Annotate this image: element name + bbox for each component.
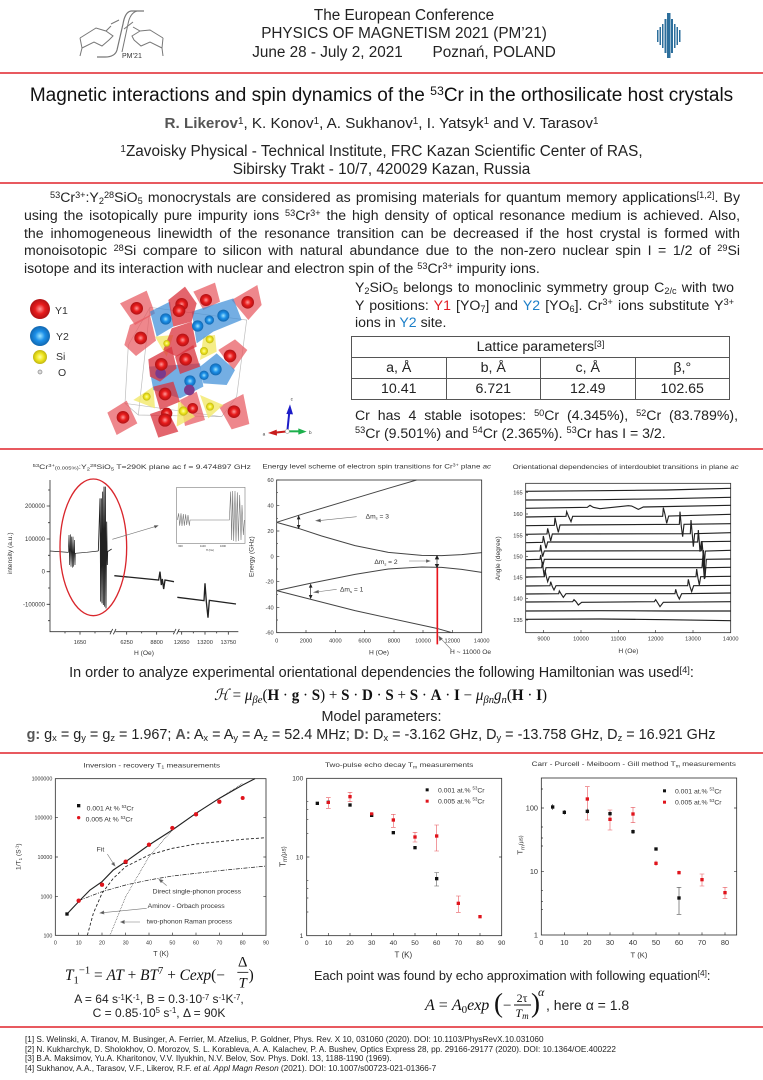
title: Magnetic interactions and spin dynamics of the 53Cr in the orthosilicate host crystals [30, 84, 733, 106]
chart: EPR spectrum: 12650 [174, 640, 190, 646]
chart: two-pulse echo decay: m [283, 857, 289, 862]
formula: T1 relaxation: T [239, 975, 249, 991]
chart: Carr-Purcell-Meiboom-Gill: m [676, 763, 680, 768]
affiliation: 1Zavoisky Physical - Technical Institute, FRC Kazan Scientific Center of RAS, [120, 143, 643, 160]
formula: echo approximation: A = A [425, 997, 462, 1014]
lattice parameters table: 12.49 [570, 381, 606, 397]
chart: EPR spectrum: 100000 [25, 537, 46, 543]
chart: two-pulse echo decay: 1 [300, 933, 304, 940]
chart: Carr-Purcell-Meiboom-Gill: 60 [675, 938, 683, 947]
chart: energy level scheme: -40 [265, 605, 274, 611]
chart: orientational dependencies: Angle (degree) [495, 536, 502, 580]
chart: energy level scheme: Δm [366, 513, 376, 520]
formula: Hamiltonian: ℋ = μ [214, 687, 253, 704]
chart: inversion recovery T1: 1000 [40, 894, 52, 900]
formula: echo approximation: m [522, 1011, 529, 1021]
chart: orientational dependencies: 140 [513, 596, 523, 602]
formula: Hamiltonian: g [494, 687, 502, 704]
crystal axes [263, 397, 312, 436]
chart: energy level scheme: Δm [340, 587, 350, 594]
chart: two-pulse echo decay: 90 [498, 940, 506, 947]
chart: energy level scheme: s [350, 589, 352, 594]
chart: two-pulse echo decay: 100 [292, 776, 304, 783]
intro text: 53Cr3+:Y228SiO5 monocrystals are considered as promising materials for quantum memory applications[1,2]. By [50, 189, 740, 206]
chart: energy level scheme: H ~ 11000 Oe [450, 649, 491, 656]
crystal description text [355, 279, 734, 330]
chart: orientational dependencies: 10000 [573, 636, 589, 642]
chart: energy level scheme: 8000 [388, 638, 400, 644]
chart: energy level scheme: 6000 [358, 638, 371, 644]
formula: echo approximation: exp [467, 997, 489, 1014]
chart: Carr-Purcell-Meiboom-Gill: Cr [714, 788, 722, 795]
formula: echo approximation: ) [531, 988, 540, 1018]
chart: energy level scheme [249, 462, 492, 656]
chart: orientational dependencies: 150 [513, 555, 523, 561]
chart: inversion recovery T1: 10000 [38, 855, 52, 861]
Hamiltonian intro: In order to analyze experimental orientational dependencies the following Hamiltonian was used[4]: [69, 665, 694, 681]
chart: two-pulse echo decay: (µs) [281, 846, 287, 857]
formula: Hamiltonian: ( [262, 687, 267, 704]
chart: EPR spectrum: 6250 [120, 640, 133, 646]
crystal description text: Y2SiO5 belongs to monoclinic symmetry group C2/c with two [355, 279, 734, 296]
formula: T1 relaxation: AT + BT [107, 967, 158, 984]
chart: two-pulse echo decay [277, 762, 506, 959]
crystal structure legend: Y1 [55, 305, 68, 317]
chart: inversion recovery T1: -1 [14, 845, 19, 849]
lattice parameters table: c, Å [576, 360, 600, 376]
chart: energy level scheme: s [384, 561, 386, 566]
lattice parameters table: 10.41 [381, 381, 416, 397]
chart: Carr-Purcell-Meiboom-Gill: Carr - Purcell - Meiboom - Gill method T [532, 761, 650, 768]
chart: EPR spectrum: 8800 [150, 640, 163, 646]
chart: Carr-Purcell-Meiboom-Gill: 0 [539, 938, 543, 947]
chart: inversion recovery T1: 53 [121, 815, 126, 820]
chart: energy level scheme: 3+ [453, 462, 459, 467]
chart: two-pulse echo decay: Cr [477, 798, 485, 805]
chart: Carr-Purcell-Meiboom-Gill: 50 [652, 938, 660, 947]
chart: inversion recovery T1: two-phonon Raman process [147, 919, 233, 926]
chart: EPR spectrum: 3+ [48, 463, 56, 468]
chart: two-pulse echo decay: 60 [433, 940, 441, 947]
crystal description text: Y positions: Y1 [YO7] and Y2 [YO6]. Cr3+ ions substitute Y3+ [355, 297, 734, 314]
chart: EPR spectrum: SiO [97, 464, 111, 471]
chart: orientational dependencies: 165 [513, 491, 523, 497]
formula: T1 relaxation: + [163, 967, 180, 984]
chart: EPR spectrum: 5 [111, 466, 115, 471]
lattice parameters table: Lattice parameters[3] [477, 339, 604, 355]
chart: energy level scheme: 20 [267, 529, 274, 535]
chart: EPR spectrum: intensity (a.u.) [7, 532, 14, 574]
chart: two-pulse echo decay: 10 [296, 854, 304, 861]
chart: EPR spectrum: 53 [33, 463, 40, 468]
chart: Carr-Purcell-Meiboom-Gill: 53 [710, 798, 715, 803]
formula: T1 relaxation: 7 [158, 966, 164, 977]
chart: EPR spectrum: 600 [178, 544, 183, 548]
formula: T1 relaxation: = [90, 967, 107, 984]
chart: inversion recovery T1: 1 [18, 857, 23, 860]
chart: inversion recovery T1: 90 [263, 940, 269, 946]
chart: energy level scheme: 60 [267, 478, 274, 484]
crystal structure legend: O [58, 367, 66, 379]
crystal axes: c [291, 397, 294, 402]
lattice parameters table [351, 336, 730, 400]
chart: Carr-Purcell-Meiboom-Gill: measurements [680, 761, 737, 768]
formula: Hamiltonian: H · I) [512, 687, 547, 704]
chart: energy level scheme: 0 [275, 638, 278, 644]
chart: Carr-Purcell-Meiboom-Gill: 0.001 at.% [675, 788, 708, 795]
chart: two-pulse echo decay: 30 [368, 940, 376, 947]
formula: echo approximation: − [503, 998, 511, 1014]
chart: Carr-Purcell-Meiboom-Gill: 0.005 at.% [675, 800, 708, 807]
chart: inversion recovery T1: 100000 [35, 816, 52, 822]
chart: inversion recovery T1: 40 [146, 940, 152, 946]
chart: inversion recovery T1: 20 [99, 940, 105, 946]
chart: energy level scheme: 10000 [415, 638, 431, 644]
formula: echo approximation: α [538, 985, 545, 999]
chart: two-pulse echo decay: measurements [417, 762, 474, 769]
crystal axes: b [309, 430, 312, 435]
chart: Carr-Purcell-Meiboom-Gill: 30 [606, 938, 614, 947]
references [25, 1035, 616, 1073]
chart: energy level scheme: Energy (GHz) [249, 536, 256, 577]
chart: two-pulse echo decay: 10 [325, 940, 332, 947]
chart: two-pulse echo decay: 53 [473, 797, 478, 802]
chart: orientational dependencies: 14000 [723, 636, 739, 642]
formula: T1 relaxation: ) [249, 967, 254, 984]
chart: inversion recovery T1: Cr [126, 806, 134, 813]
chart: two-pulse echo decay: 70 [455, 940, 462, 947]
references: [4] Sukhanov, A.A., Tarasov, V.F., Likerov, R.F. et al. Appl Magn Reson (2021). DOI: 10.1007/s00723-021-01366-7 [25, 1064, 436, 1073]
chart: Carr-Purcell-Meiboom-Gill: 10 [560, 938, 568, 947]
chart: energy level scheme: 14000 [474, 638, 490, 644]
chart: inversion recovery T1: 0 [54, 940, 57, 946]
chart: Carr-Purcell-Meiboom-Gill: 80 [721, 938, 729, 947]
chart: energy level scheme: 12000 [444, 638, 460, 644]
references: [1] S. Welinski, A. Tiranov, M. Businger, A. Ferrier, M. Afzelius, P. Goldner, Phys. Rev. X 10, 031060 (2020). DOI: 10.1103/PhysRevX.10.031060 [25, 1035, 544, 1044]
isotopes text: Cr has 4 stable isotopes: 50Cr (4.345%), 52Cr (83.789%), [355, 407, 738, 423]
chart: Carr-Purcell-Meiboom-Gill: 10 [530, 867, 538, 876]
logo: PM'21 conference hands [80, 11, 163, 60]
chart: Carr-Purcell-Meiboom-Gill: 20 [583, 938, 591, 947]
chart: energy level scheme: ac [483, 464, 492, 471]
crystal structure legend [30, 299, 69, 379]
formula: T1 relaxation [65, 955, 254, 991]
chart: inversion recovery T1: 53 [122, 804, 127, 809]
chart: EPR spectrum: (0.005%) [55, 466, 79, 471]
chart: Carr-Purcell-Meiboom-Gill: 70 [698, 938, 706, 947]
intro text: monoisotopic 28Si compare to silicon with natural abundance due to the non-zero nuclear spin I = 1/2 of 29Si [24, 242, 740, 258]
chart: Carr-Purcell-Meiboom-Gill: 1 [534, 930, 538, 939]
chart: orientational dependencies: Orientational dependencies of interdoublet transitions in plane ac [513, 464, 740, 471]
chart: Carr-Purcell-Meiboom-Gill: (µs) [519, 835, 525, 845]
chart: two-pulse echo decay: 20 [346, 940, 354, 947]
conference header: June 28 - July 2, 2021 Poznań, POLAND [252, 44, 556, 61]
chart: orientational dependencies: 13000 [685, 636, 701, 642]
chart: Carr-Purcell-Meiboom-Gill [516, 761, 737, 960]
chart: energy level scheme: Δm [374, 559, 384, 566]
chart: Carr-Purcell-Meiboom-Gill: T (K) [631, 951, 648, 960]
isotopes text [355, 407, 738, 441]
isotopes text: 53Cr (9.501%) and 54Cr (2.365%). 53Cr has I = 3/2. [355, 425, 666, 441]
formula: echo approximation: 0 [462, 1004, 468, 1016]
chart: inversion recovery T1: Cr [125, 817, 133, 824]
chart: Carr-Purcell-Meiboom-Gill: 53 [710, 787, 715, 792]
references: [3] B.A. Maksimov, Yu.A. Kharitonov, V.V. Ilyukhin, N.V. Belov, Sov. Phys. Dokl. 13, 1188-1190 (1969). [25, 1054, 392, 1063]
formula: Hamiltonian: ( [507, 687, 512, 704]
chart: orientational dependencies: 135 [513, 618, 523, 624]
chart: orientational dependencies: 9000 [537, 636, 550, 642]
authors: R. Likerov1, K. Konov1, A. Sukhanov1, I. Yatsyk1 and V. Tarasov1 [165, 115, 598, 132]
chart: two-pulse echo decay: 50 [411, 940, 419, 947]
T1 fit parameters: A = 64 s-1K-1, B = 0.3·10-7 s-1K-7, [74, 992, 244, 1006]
chart: EPR spectrum: H (Oe) [134, 650, 154, 657]
chart: inversion recovery T1: measurements [164, 762, 221, 769]
chart: orientational dependencies: 145 [513, 575, 523, 581]
formula: T1 relaxation: Δ [238, 955, 247, 971]
affiliation [120, 143, 643, 178]
chart: energy level scheme: 0 [271, 554, 274, 560]
references: [2] N. Kukharchyk, D. Sholokhov, O. Morozov, S. L. Korableva, A. A. Kalachev, P. A. Bushev, Optics Express 28, pp. 29166-29177 (2020). DOI: 10.1364/OE.400222 [25, 1045, 616, 1054]
lattice parameters table: 102.65 [661, 381, 704, 397]
chart: two-pulse echo decay: Cr [477, 787, 485, 794]
chart: two-pulse echo decay: 0 [305, 940, 309, 947]
chart: EPR spectrum: H (Oe) [206, 548, 214, 552]
formula: echo approximation: 2τ [517, 991, 528, 1005]
chart: energy level scheme: Energy level scheme of electron spin transitions for Cr [262, 464, 418, 471]
chart: energy level scheme: s [376, 516, 378, 521]
T1 fit parameters: C = 0.85·105 s-1, Δ = 90K [93, 1006, 225, 1020]
chart: energy level scheme: = 2 [386, 559, 398, 566]
chart: energy level scheme: plane [459, 464, 483, 471]
chart: two-pulse echo decay: 0.001 at.% [438, 787, 471, 794]
chart: energy level scheme: = 1 [352, 587, 364, 594]
chart: EPR spectrum: 2 [87, 466, 91, 471]
chart: two-pulse echo decay: Two-pulse echo decay T [325, 762, 397, 769]
chart: EPR spectrum: :Y [79, 464, 88, 471]
chart: two-pulse echo decay: 0.005 at.% [438, 798, 471, 805]
chart: energy level scheme: 40 [267, 504, 274, 510]
chart: inversion recovery T1: 60 [193, 940, 199, 946]
chart: inversion recovery T1 [14, 762, 269, 958]
chart: inversion recovery T1: 0.005 At % [86, 817, 119, 824]
chart: Carr-Purcell-Meiboom-Gill: Cr [714, 800, 722, 807]
lattice parameters table: b, Å [481, 360, 506, 376]
chart: inversion recovery T1: 1/T [16, 860, 23, 870]
formula: Hamiltonian: H · g · S) + S · D · S + S · A · I − μ [267, 687, 484, 704]
logo: PM'21 conference hands: PM’21 [122, 53, 142, 60]
chart: energy level scheme: -60 [265, 631, 274, 637]
formula: echo approximation [424, 985, 545, 1021]
chart: EPR spectrum: 1650 [74, 640, 86, 646]
formula: T1 relaxation: Cexp(− [180, 967, 225, 984]
formula: echo approximation: T [515, 1006, 522, 1020]
chart: energy level scheme: 2000 [300, 638, 312, 644]
chart: two-pulse echo decay: T (K) [395, 950, 412, 959]
chart: Carr-Purcell-Meiboom-Gill: m [520, 845, 526, 850]
chart: orientational dependencies: 12000 [648, 636, 664, 642]
chart: Carr-Purcell-Meiboom-Gill: T [516, 850, 525, 855]
chart: Carr-Purcell-Meiboom-Gill: 100 [526, 803, 538, 812]
chart: inversion recovery T1: Inversion - recovery T [83, 762, 148, 769]
chart: inversion recovery T1: T (K) [153, 951, 169, 958]
chart: two-pulse echo decay: 53 [473, 786, 478, 791]
chart: inversion recovery T1: 50 [169, 940, 175, 946]
chart: orientational dependencies: 11000 [611, 636, 626, 642]
formula: echo approximation: ( [494, 988, 503, 1018]
chart: EPR spectrum: 1600 [220, 544, 226, 548]
chart: inversion recovery T1: Aminov - Orbach process [148, 903, 225, 910]
chart: inversion recovery T1: Direct single-phonon process [153, 888, 242, 895]
chart: inversion recovery T1: 30 [123, 940, 129, 946]
chart: inversion recovery T1: 1 [161, 765, 165, 770]
lattice parameters table: 6.721 [475, 381, 511, 397]
chart: two-pulse echo decay: 80 [476, 940, 484, 947]
model parameters heading: Model parameters: [322, 709, 441, 725]
lattice parameters table: β,° [673, 360, 691, 376]
chart: inversion recovery T1: ) [16, 843, 23, 846]
chart: EPR spectrum: 28 [90, 463, 97, 468]
chart: EPR spectrum: 1100 [200, 544, 206, 548]
chart: energy level scheme: H (Oe) [369, 649, 389, 656]
crystal description text: ions in Y2 site. [355, 314, 446, 330]
chart: two-pulse echo decay: T [277, 862, 287, 867]
intro text [24, 189, 740, 276]
chart: EPR spectrum: 200000 [25, 504, 46, 510]
T1 fit parameters [74, 992, 244, 1020]
chart: energy level scheme: 4000 [329, 638, 342, 644]
intro text: using the isotopically pure impurity ions 53Cr3+ the high density of optical resonance medium is achieved. Also, [24, 207, 740, 223]
formula: Hamiltonian: βn [482, 694, 495, 706]
chart: energy level scheme: -20 [265, 580, 274, 586]
echo approximation text: Each point was found by echo approximation with following equation[4]: [314, 969, 710, 983]
chart: Carr-Purcell-Meiboom-Gill: 40 [629, 938, 637, 947]
alpha value: , here α = 1.8 [546, 997, 629, 1013]
chart: inversion recovery T1: 10 [76, 940, 82, 946]
chart: orientational dependencies: 155 [513, 533, 523, 539]
crystal structure model [107, 283, 262, 438]
chart: two-pulse echo decay: 40 [390, 940, 397, 947]
chart: inversion recovery T1: 0.001 At % [87, 806, 120, 813]
chart: orientational dependencies: 160 [513, 512, 523, 518]
formula: Hamiltonian: βe [251, 694, 263, 706]
intro text: the inhomogeneous linewidth of the resonance transition can be decreased if the host crystal is formed with [24, 225, 740, 241]
logo: blue waveform [657, 13, 680, 58]
crystal structure legend: Si [56, 351, 65, 363]
chart: orientational dependencies [495, 464, 740, 655]
chart: EPR spectrum: Cr [39, 464, 48, 471]
chart: EPR spectrum: 0 [42, 570, 46, 576]
formula: T1 relaxation: −1 [79, 965, 90, 976]
formula: T1 relaxation: T [65, 967, 75, 984]
chart: inversion recovery T1: 100 [43, 933, 52, 939]
chart: inversion recovery T1: 70 [216, 940, 222, 946]
conference header [252, 7, 556, 61]
formula: Hamiltonian: n [502, 694, 507, 706]
chart: EPR spectrum: 13200 [197, 640, 213, 646]
chart: energy level scheme: = 3 [378, 513, 389, 520]
model parameters values: g: gx = gy = gz = 1.967; A: Ax = Ay = Az = 52.4 MHz; D: Dx = -3.162 GHz, Dy = -13.758 GHz, Dz = 16.921 GHz [27, 727, 715, 743]
chart: two-pulse echo decay: m [413, 764, 418, 769]
chart: orientational dependencies: H (Oe) [618, 648, 638, 655]
conference header: PHYSICS OF MAGNETISM 2021 (PM’21) [261, 25, 547, 42]
crystal structure legend: Y2 [56, 331, 69, 343]
affiliation: Sibirsky Trakt - 10/7, 420029 Kazan, Russia [233, 160, 530, 178]
lattice parameters table: a, Å [386, 360, 411, 376]
chart: inversion recovery T1: 80 [240, 940, 246, 946]
conference header: The European Conference [314, 7, 494, 24]
crystal axes: a [263, 431, 266, 436]
chart: EPR spectrum: T=290K plane ac f = 9.474897 GHz [114, 464, 251, 471]
intro text: isotope and its interaction with nuclear and electron spin of the 53Cr3+ impurity ions. [24, 260, 540, 276]
chart: inversion recovery T1: (S [16, 849, 23, 858]
chart: inversion recovery T1: Fit [97, 847, 104, 854]
chart: EPR spectrum [7, 463, 251, 657]
chart: EPR spectrum: 13750 [220, 640, 236, 646]
chart: EPR spectrum: -100000 [23, 602, 46, 608]
formula: T1 relaxation: 1 [74, 975, 79, 986]
chart: inversion recovery T1: 1000000 [32, 777, 52, 783]
